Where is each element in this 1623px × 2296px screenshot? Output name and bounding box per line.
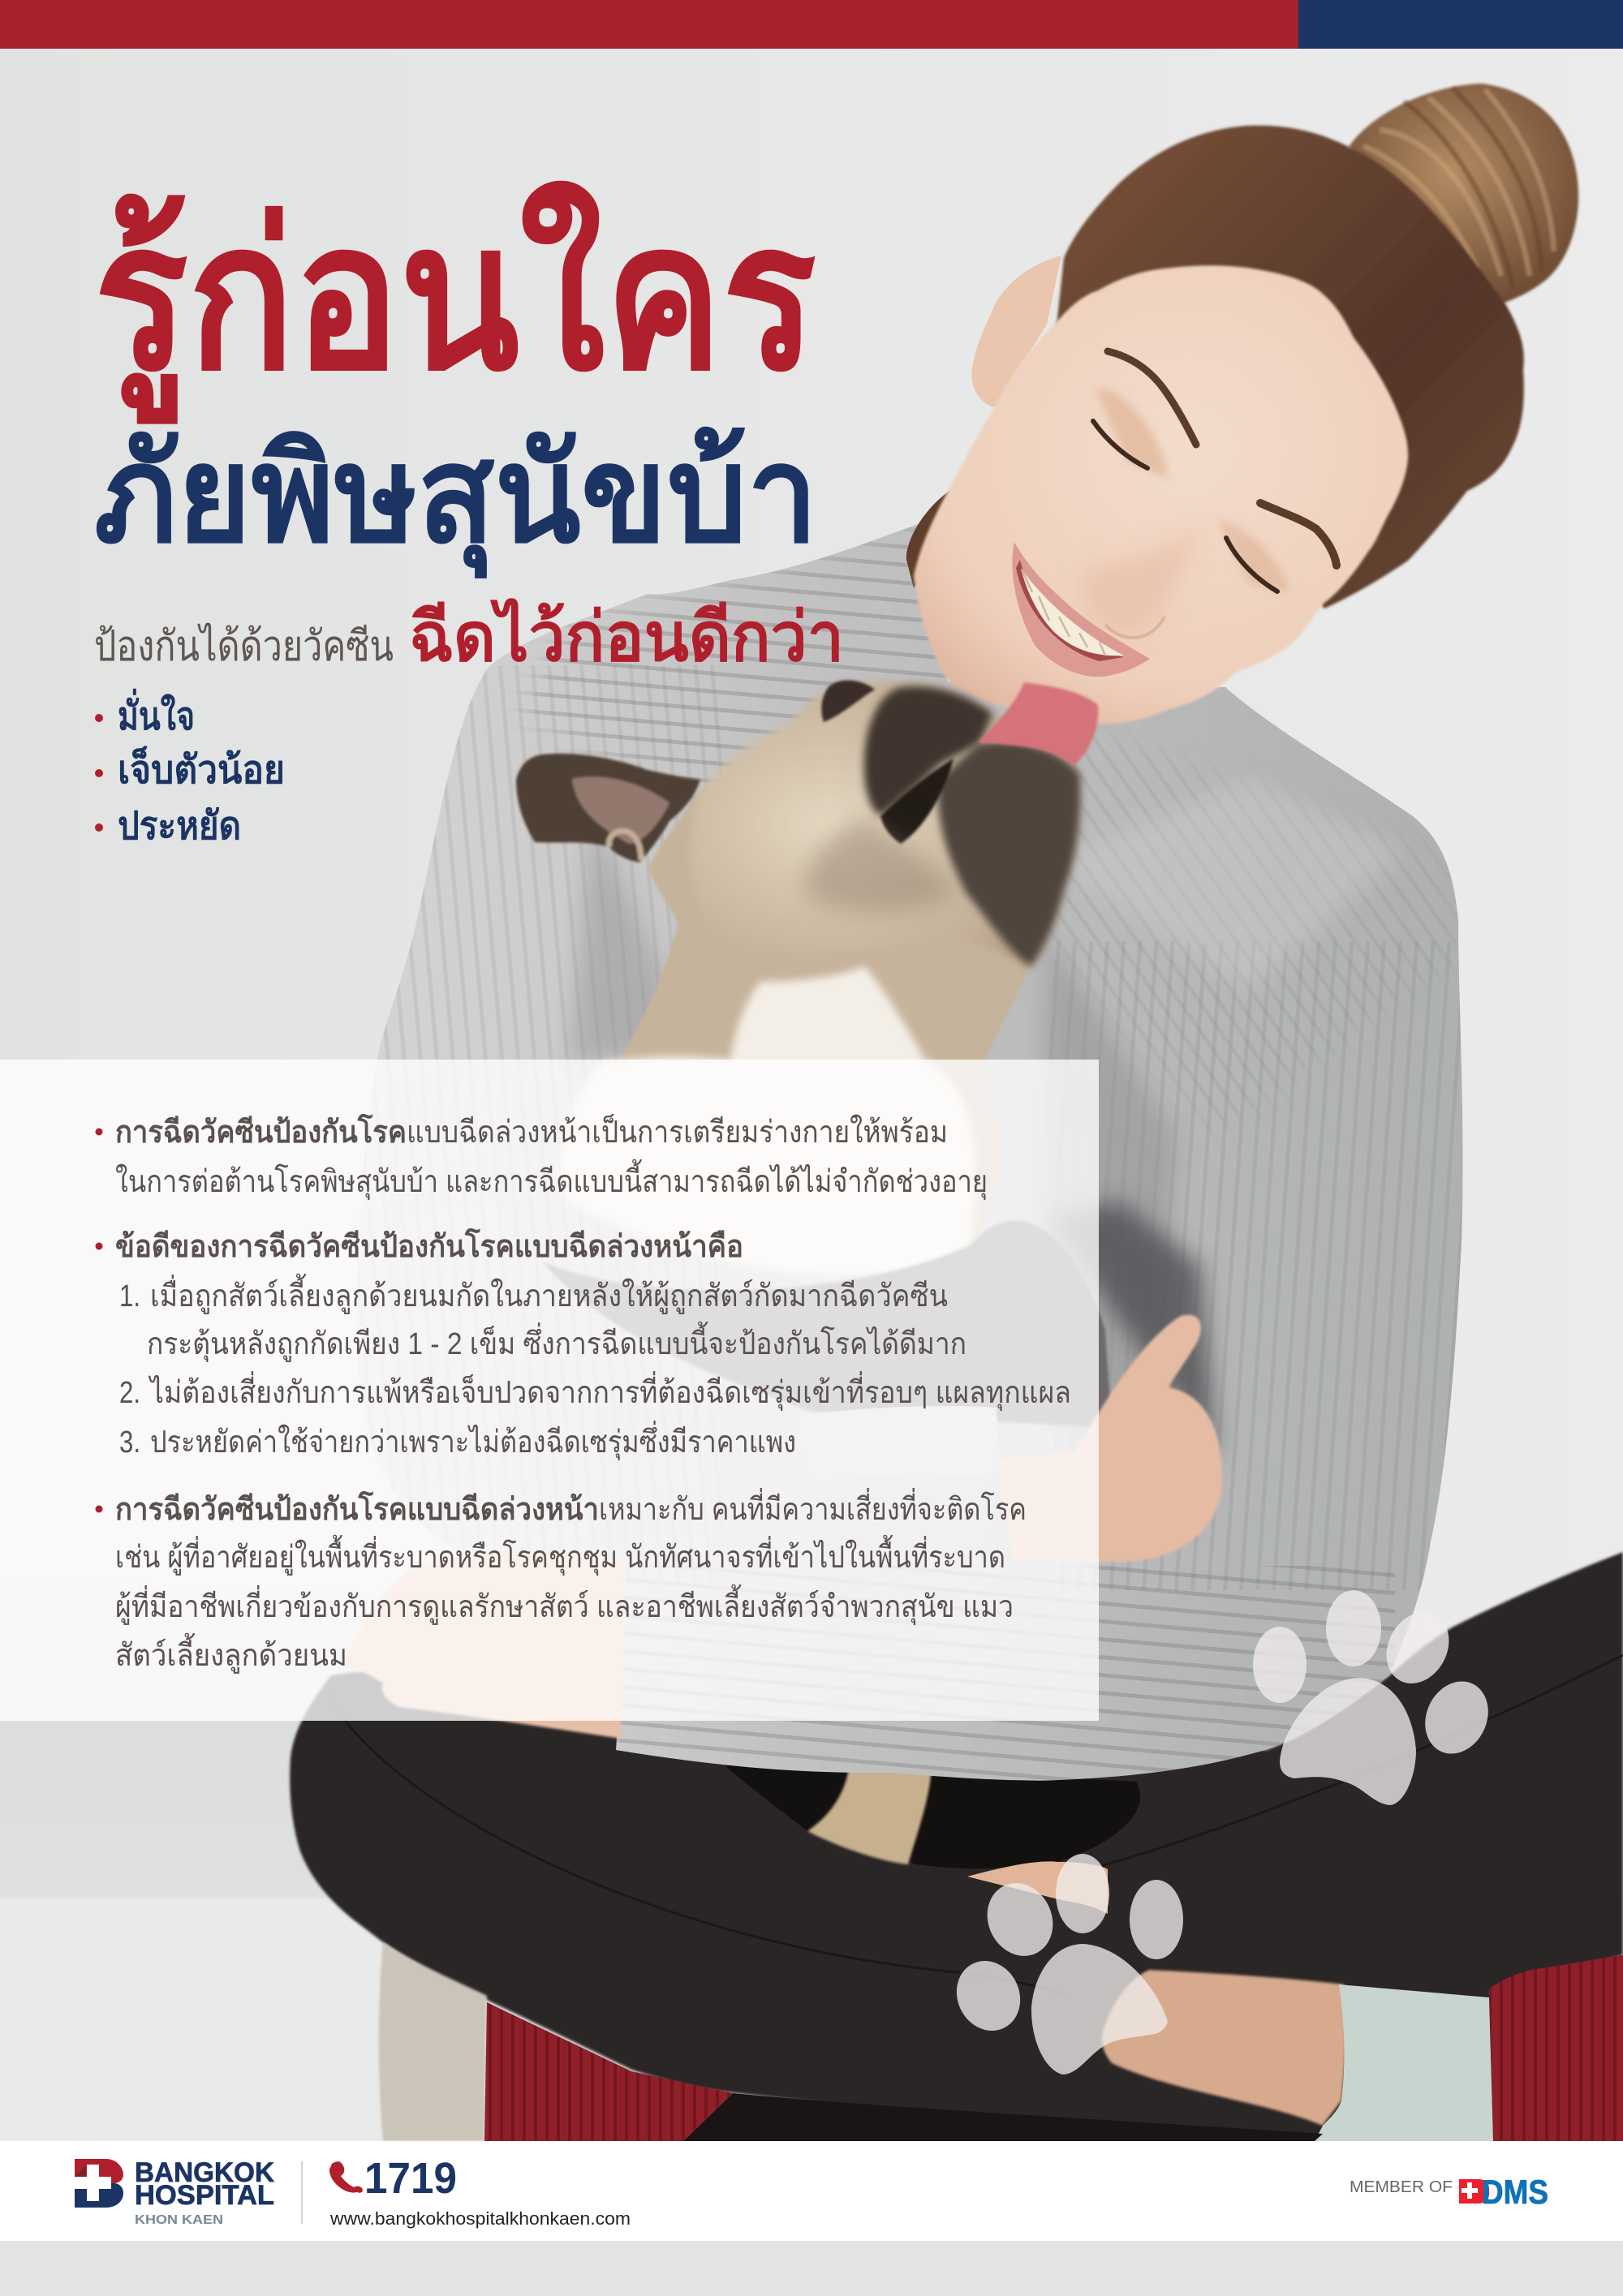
nose and cheek shading (1083, 389, 1290, 638)
subtitle (94, 598, 844, 675)
benefit list: ประหยัด (118, 805, 241, 848)
sweater (377, 524, 1462, 1781)
dog leg (807, 1769, 932, 1864)
hair bun (1349, 84, 1578, 304)
toe (1375, 1601, 1461, 1695)
hospital name: BANGKOK (135, 2157, 274, 2188)
photo: woman hugging a dog (290, 84, 1623, 2141)
paragraph one: แบบฉีดล่วงหน้าเป็นการเตรียมร่างกายให้พร้อม (407, 1113, 948, 1150)
paragraph two: advantages: ข้อดีของการฉีดวัคซีนป้องกันโรคแบบฉีดล่วงหน้าคือ (115, 1228, 743, 1264)
paragraph two: advantages (96, 1228, 1071, 1460)
eyebrows (1108, 351, 1337, 565)
black floor shadow (683, 2093, 1323, 2141)
paragraph two: advantages: 1. (119, 1279, 140, 1314)
paragraph three: เช่น ผู้ที่อาศัยอยู่ในพื้นที่ระบาดหรือโรคชุกชุม นักทัศนาจรที่เข้าไปในพื้นที่ระบาด (115, 1534, 1005, 1576)
paragraph two: advantages: กระตุ้นหลังถูกกัดเพียง 1 - 2 เข็ม ซึ่งการฉีดแบบนี้จะป้องกันโรคได้ดีมาก (147, 1321, 966, 1362)
dog muzzle (806, 680, 1080, 966)
subtitle: ป้องกันได้ด้วยวัคซีน (94, 622, 394, 670)
hand on the right (997, 1315, 1222, 1562)
toe (1056, 1854, 1109, 1933)
member of BDMS logo: DMS (1482, 2173, 1548, 2211)
thigh and knee, trousers (290, 1552, 1623, 2141)
paw print, upper (1253, 1590, 1500, 1805)
bottom strip (0, 2241, 1623, 2296)
toe (1414, 1671, 1500, 1764)
paragraph two: advantages: ไม่ต้องเสี่ยงกับการแพ้หรือเจ็บปวดจากการที่ต้องฉีดเซรุ่มเข้าที่รอบๆ แผลทุกแผล (148, 1371, 1071, 1411)
paragraph three: ผู้ที่มีอาชีพเกี่ยวข้องกับการดูแลรักษาสัตว์ และอาชีพเลี้ยงสัตว์จำพวกสุนัข แมว (115, 1584, 1014, 1625)
top colour bar (0, 0, 1623, 49)
skin behind the knee (967, 1861, 1108, 1914)
ankle skin (1102, 1970, 1345, 2126)
paragraph two: advantages: 2. (119, 1376, 140, 1410)
subtitle: ฉีดไว้ก่อนดีกว่า (409, 598, 844, 675)
title line two: ภัยพิษสุนัขบ้า (94, 420, 818, 578)
toe (975, 1872, 1065, 1967)
paragraph two: advantages: 3. (119, 1425, 140, 1460)
hair strands behind neck (906, 491, 954, 588)
toe (945, 1950, 1031, 2041)
member of BDMS logo (1350, 2173, 1548, 2211)
member of BDMS logo: MEMBER OF (1350, 2178, 1453, 2196)
paragraph three (96, 1488, 1027, 1674)
left shoe sole (379, 1942, 487, 2141)
pad (1031, 1944, 1168, 2075)
hospital logo mark (75, 2159, 123, 2208)
trouser seam lines (329, 1655, 1623, 1996)
hospital name: KHON KAEN (135, 2213, 223, 2227)
sock (1315, 1984, 1493, 2141)
paragraph two: advantages: ประหยัดค่าใช้จ่ายกว่าเพราะไม่ต้องฉีดเซรุ่มซึ่งมีราคาแพง (150, 1421, 796, 1460)
pad (1280, 1678, 1416, 1805)
dark gap under the sweater (719, 1761, 1140, 1868)
face (914, 265, 1408, 724)
benefit list: มั่นใจ (118, 688, 195, 738)
dog shoulder and neck (609, 730, 1031, 1261)
hotline number: 1719 (364, 2154, 457, 2203)
hospital name: HOSPITAL (135, 2180, 274, 2211)
paragraph three: เหมาะกับ คนที่มีความเสี่ยงที่จะติดโรค (599, 1488, 1027, 1527)
toe (1130, 1880, 1183, 1959)
footer band (0, 2141, 1623, 2241)
paragraph three: การฉีดวัคซีนป้องกันโรคแบบฉีดล่วงหน้า (115, 1490, 599, 1527)
dog sweater (542, 1220, 1112, 1428)
dog ear (516, 754, 700, 862)
paw print, lower (945, 1854, 1183, 2075)
paragraph one: ในการต่อต้านโรคพิษสุนับบ้า และการฉีดแบบนี้สามารถฉีดได้ไม่จำกัดช่วงอายุ (115, 1159, 988, 1200)
benefit list (95, 688, 285, 848)
paragraph two: advantages: เมื่อถูกสัตว์เลี้ยงลูกด้วยนมกัดในภายหลังให้ผู้ถูกสัตว์กัดมากฉีดวัคซีน (150, 1273, 948, 1314)
dog head (691, 681, 1080, 966)
dog tongue (978, 682, 1098, 766)
hair (1055, 126, 1524, 608)
paragraph one: การฉีดวัคซีนป้องกันโรค (115, 1113, 407, 1150)
mouth and smile (1012, 542, 1150, 677)
toe (1326, 1590, 1381, 1666)
toe (1253, 1627, 1307, 1703)
paragraph three: สัตว์เลี้ยงลูกด้วยนม (115, 1632, 347, 1674)
left hand (342, 1550, 625, 1739)
translucent text panel (0, 1060, 1099, 1721)
hospital name (135, 2157, 274, 2227)
dog chest fur (560, 966, 975, 1275)
icon: phone (329, 2161, 363, 2193)
title line one: รู้ก่อนใคร (94, 180, 816, 424)
sleeve cuff (798, 1406, 1000, 1485)
closed eyes (1093, 421, 1277, 591)
paragraph one (96, 1113, 988, 1200)
ear (971, 256, 1061, 407)
left shoe upper (484, 2002, 733, 2141)
red shoe, right (1489, 1955, 1623, 2141)
website: www.bangkokhospitalkhonkaen.com (329, 2208, 631, 2229)
benefit list: เจ็บตัวน้อย (118, 746, 285, 792)
